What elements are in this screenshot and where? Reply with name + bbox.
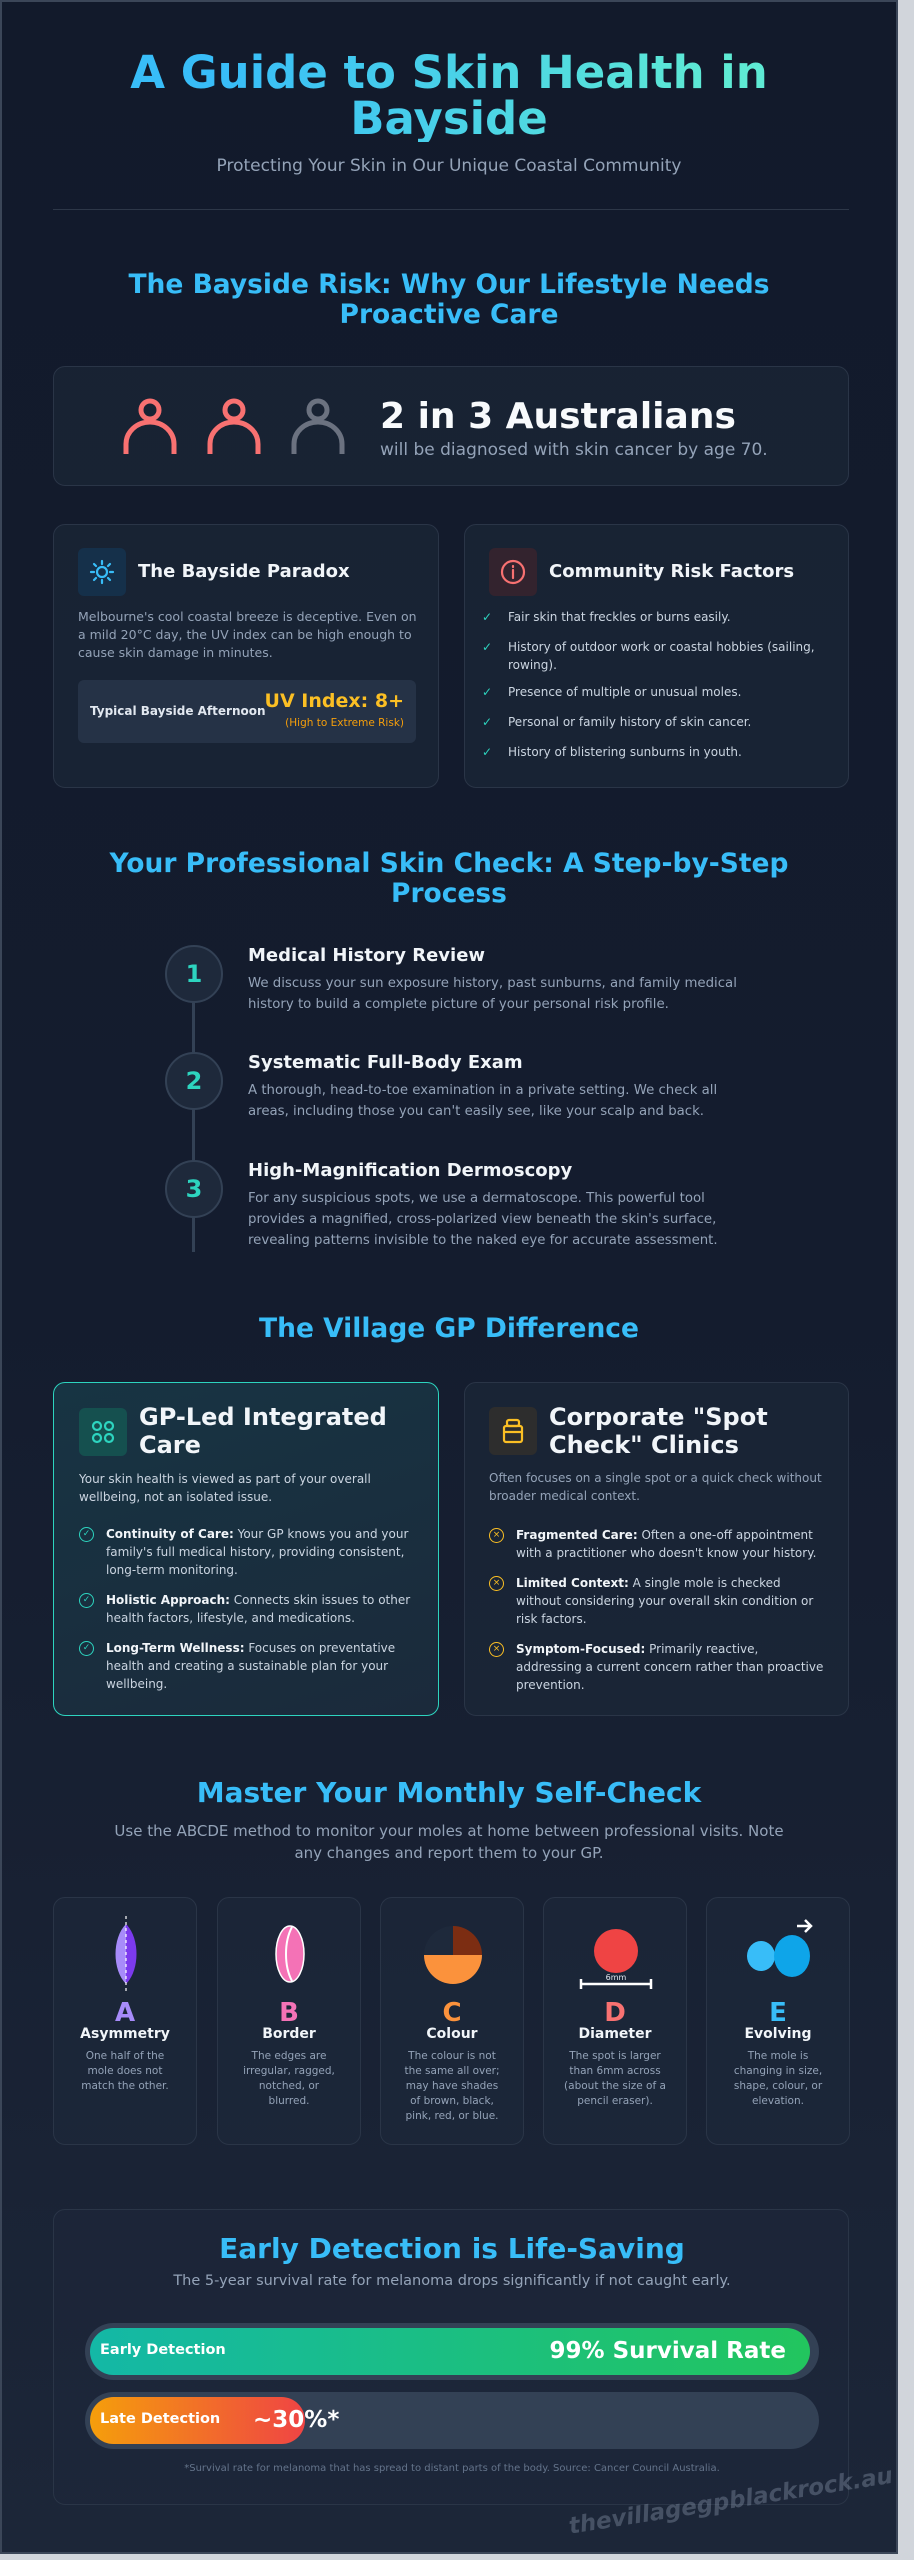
list <box>482 610 815 759</box>
card: C: The colour is not the same all over; may have shades of brown, black, pink, red, or blue. <box>404 2050 500 2122</box>
panel: corporate spot check: × <box>493 1530 500 1540</box>
panel: GP-led care <box>53 1382 439 1716</box>
stat text: 2 in 3 Australians <box>380 396 736 437</box>
card: A <box>53 1897 197 2145</box>
title <box>2 50 896 142</box>
icon: evolving <box>747 1919 813 1977</box>
panel: community risk factors: ✓ <box>482 640 492 654</box>
step 2 <box>165 1052 717 1119</box>
panel: community risk factors: Presence of multiple or unusual moles. <box>508 685 741 699</box>
footnote: *Survival rate for melanoma that has spread to distant parts of the body. Source: Cancer Council Australia. <box>184 2463 720 2474</box>
heading: Community Risk Factors <box>549 561 794 582</box>
timeline: 2 <box>186 1067 202 1095</box>
icon: colour <box>424 1926 482 1984</box>
panel: community risk factors: Fair skin that freckles or burns easily. <box>508 610 731 624</box>
section title: Bayside risk: The Bayside Risk: Why Our Lifestyle Needs <box>128 269 770 300</box>
stat text: will be diagnosed with skin cancer by age 70. <box>380 440 768 460</box>
panel: GP-led care: ✓ <box>83 1643 90 1653</box>
panel: community risk factors: Personal or family history of skin cancer. <box>508 715 751 729</box>
card: B: Border <box>262 2026 316 2042</box>
card: A: Asymmetry <box>80 2026 170 2042</box>
card: D: Diameter <box>578 2026 652 2042</box>
text: Melbourne's cool coastal breeze is deceptive. Even on a mild 20°C day, the UV index can be high enough to cause skin damage in minutes. <box>78 609 417 660</box>
timeline: High-Magnification Dermoscopy <box>248 1160 572 1181</box>
timeline: 1 <box>186 960 202 988</box>
heading <box>139 1403 387 1459</box>
step 3 <box>165 1160 718 1248</box>
timeline: Medical History Review <box>248 945 485 966</box>
timeline: 3 <box>186 1175 202 1203</box>
section title: Bayside risk: Proactive Care <box>340 299 558 330</box>
list <box>79 1527 410 1691</box>
card: C <box>380 1897 524 2145</box>
text: Often focuses on a single spot or a quick check without broader medical context. <box>489 1471 822 1503</box>
heading: Check" Clinics <box>549 1431 739 1459</box>
section title: steps <box>109 848 788 909</box>
panel: GP-led care: ✓ <box>83 1529 90 1539</box>
heading: Early Detection is Life-Saving <box>219 2232 685 2265</box>
panel: corporate spot check: Symptom-Focused: Primarily reactive, addressing a current concern rather than proactive prevention. <box>516 1642 823 1692</box>
card: E: Evolving <box>744 2026 812 2042</box>
section title: village GP difference: The Village GP Difference <box>259 1313 639 1344</box>
panel: early detection <box>53 2209 849 2505</box>
heading: GP-Led Integrated <box>139 1403 387 1431</box>
bar: early <box>85 2323 819 2380</box>
timeline: Systematic Full-Body Exam <box>248 1052 523 1073</box>
icon: diameter: 6mm <box>606 1973 627 1982</box>
panel: GP-led care: Long-Term Wellness: Focuses on preventative health and creating a sustainable plan for your wellbeing. <box>106 1641 395 1691</box>
panel: community risk factors: ✓ <box>482 745 492 759</box>
section title: steps: Process <box>391 878 507 909</box>
UV callout: Typical Bayside Afternoon <box>90 704 266 718</box>
panel: community risk factors: History of outdoor work or coastal hobbies (sailing, rowing). <box>508 640 815 672</box>
panel: community risk factors: ✓ <box>482 610 492 624</box>
card: B <box>217 1897 361 2145</box>
section title: Bayside risk <box>128 269 770 330</box>
panel: community risk factors: ✓ <box>482 715 492 729</box>
UV callout: (High to Extreme Risk) <box>285 717 404 729</box>
icon: asymmetry <box>116 1916 136 1991</box>
bar: late: Late Detection <box>100 2411 220 2427</box>
heading: Care <box>139 1431 201 1459</box>
icon: grid <box>79 1408 127 1456</box>
card: C: Colour <box>426 2026 478 2042</box>
card: C: C <box>442 1998 462 2028</box>
icon: jar <box>489 1407 537 1455</box>
heading: Corporate "Spot <box>549 1403 768 1431</box>
UV callout: UV Index: 8+ <box>265 690 404 712</box>
heading <box>549 1403 768 1459</box>
panel: GP-led care: ✓ <box>83 1595 90 1605</box>
icon: sun <box>78 548 126 596</box>
panel: community risk factors <box>464 524 849 788</box>
panel: Bayside paradox <box>53 524 439 788</box>
watermark: thevillagegpblackrock.au <box>567 2463 895 2540</box>
card: B: B <box>279 1998 299 2028</box>
card: D: The spot is larger than 6mm across (about the size of a pencil eraser). <box>564 2050 666 2107</box>
panel: corporate spot check: × <box>493 1644 500 1654</box>
stat card <box>53 366 849 486</box>
bar: early: 99% Survival Rate <box>550 2338 786 2364</box>
icon: people <box>124 398 344 454</box>
timeline <box>165 945 737 1252</box>
card: B: The edges are irregular, ragged, notched, or blurred. <box>243 2050 335 2107</box>
card: E: E <box>769 1998 787 2028</box>
bar: early: Early Detection <box>100 2342 226 2358</box>
panel: GP-led care: Holistic Approach: Connects skin issues to other health factors, lifestyle, and medications. <box>106 1593 410 1625</box>
section subtitle: Use the ABCDE method to monitor your moles at home between professional visits. Note any changes and report them to your GP. <box>114 1822 784 1862</box>
card: A: A <box>115 1998 135 2028</box>
panel: corporate spot check: Fragmented Care: Often a one-off appointment with a practitioner who doesn't know your history. <box>516 1528 816 1560</box>
card: D <box>543 1897 687 2145</box>
bar: late <box>85 2392 819 2449</box>
panel: corporate spot check <box>464 1382 849 1716</box>
step 1 <box>165 945 737 1012</box>
title: Bayside <box>350 92 548 145</box>
card: A: One half of the mole does not match the other. <box>81 2050 169 2092</box>
section title: self-check: Master Your Monthly Self-Check <box>197 1776 701 1809</box>
timeline: A thorough, head-to-toe examination in a private setting. We check all areas, including those you can't easily see, like your scalp and back. <box>248 1083 717 1119</box>
card: E: The mole is changing in size, shape, colour, or elevation. <box>734 2050 822 2107</box>
heading: The Bayside Paradox <box>138 561 350 582</box>
UV callout <box>78 680 416 743</box>
title: A Guide to Skin Health in <box>130 46 768 99</box>
panel: corporate spot check: × <box>493 1578 500 1588</box>
icon: diameter <box>580 1929 652 1989</box>
card: D: D <box>604 1998 626 2028</box>
section title: steps: Your Professional Skin Check: A Step-by-Step <box>110 848 788 879</box>
timeline: We discuss your sun exposure history, past sunburns, and family medical history to build a complete picture of your personal risk profile. <box>248 976 737 1012</box>
panel: community risk factors: History of blistering sunburns in youth. <box>508 745 742 759</box>
subtitle: Protecting Your Skin in Our Unique Coastal Community <box>216 156 682 176</box>
timeline: For any suspicious spots, we use a dermatoscope. This powerful tool provides a magnified, cross-polarized view beneath the skin's surface, revealing patterns invisible to the naked eye for accurate assessment. <box>248 1191 718 1248</box>
icon: info <box>489 548 537 596</box>
bar: late: ~30%* <box>253 2407 339 2433</box>
panel: GP-led care: Continuity of Care: Your GP knows you and your family's full medical history, providing consistent, long-term monitoring. <box>106 1527 408 1577</box>
list <box>489 1528 823 1692</box>
card: E <box>706 1897 850 2145</box>
text: Your skin health is viewed as part of your overall wellbeing, not an isolated issue. <box>79 1472 371 1504</box>
panel: community risk factors: ✓ <box>482 685 492 699</box>
icon: border <box>275 1925 305 1983</box>
panel: corporate spot check: Limited Context: A single mole is checked without considering your overall skin condition or risk factors. <box>516 1576 813 1626</box>
subtitle: The 5-year survival rate for melanoma drops significantly if not caught early. <box>173 2273 731 2289</box>
stat text <box>380 396 768 460</box>
